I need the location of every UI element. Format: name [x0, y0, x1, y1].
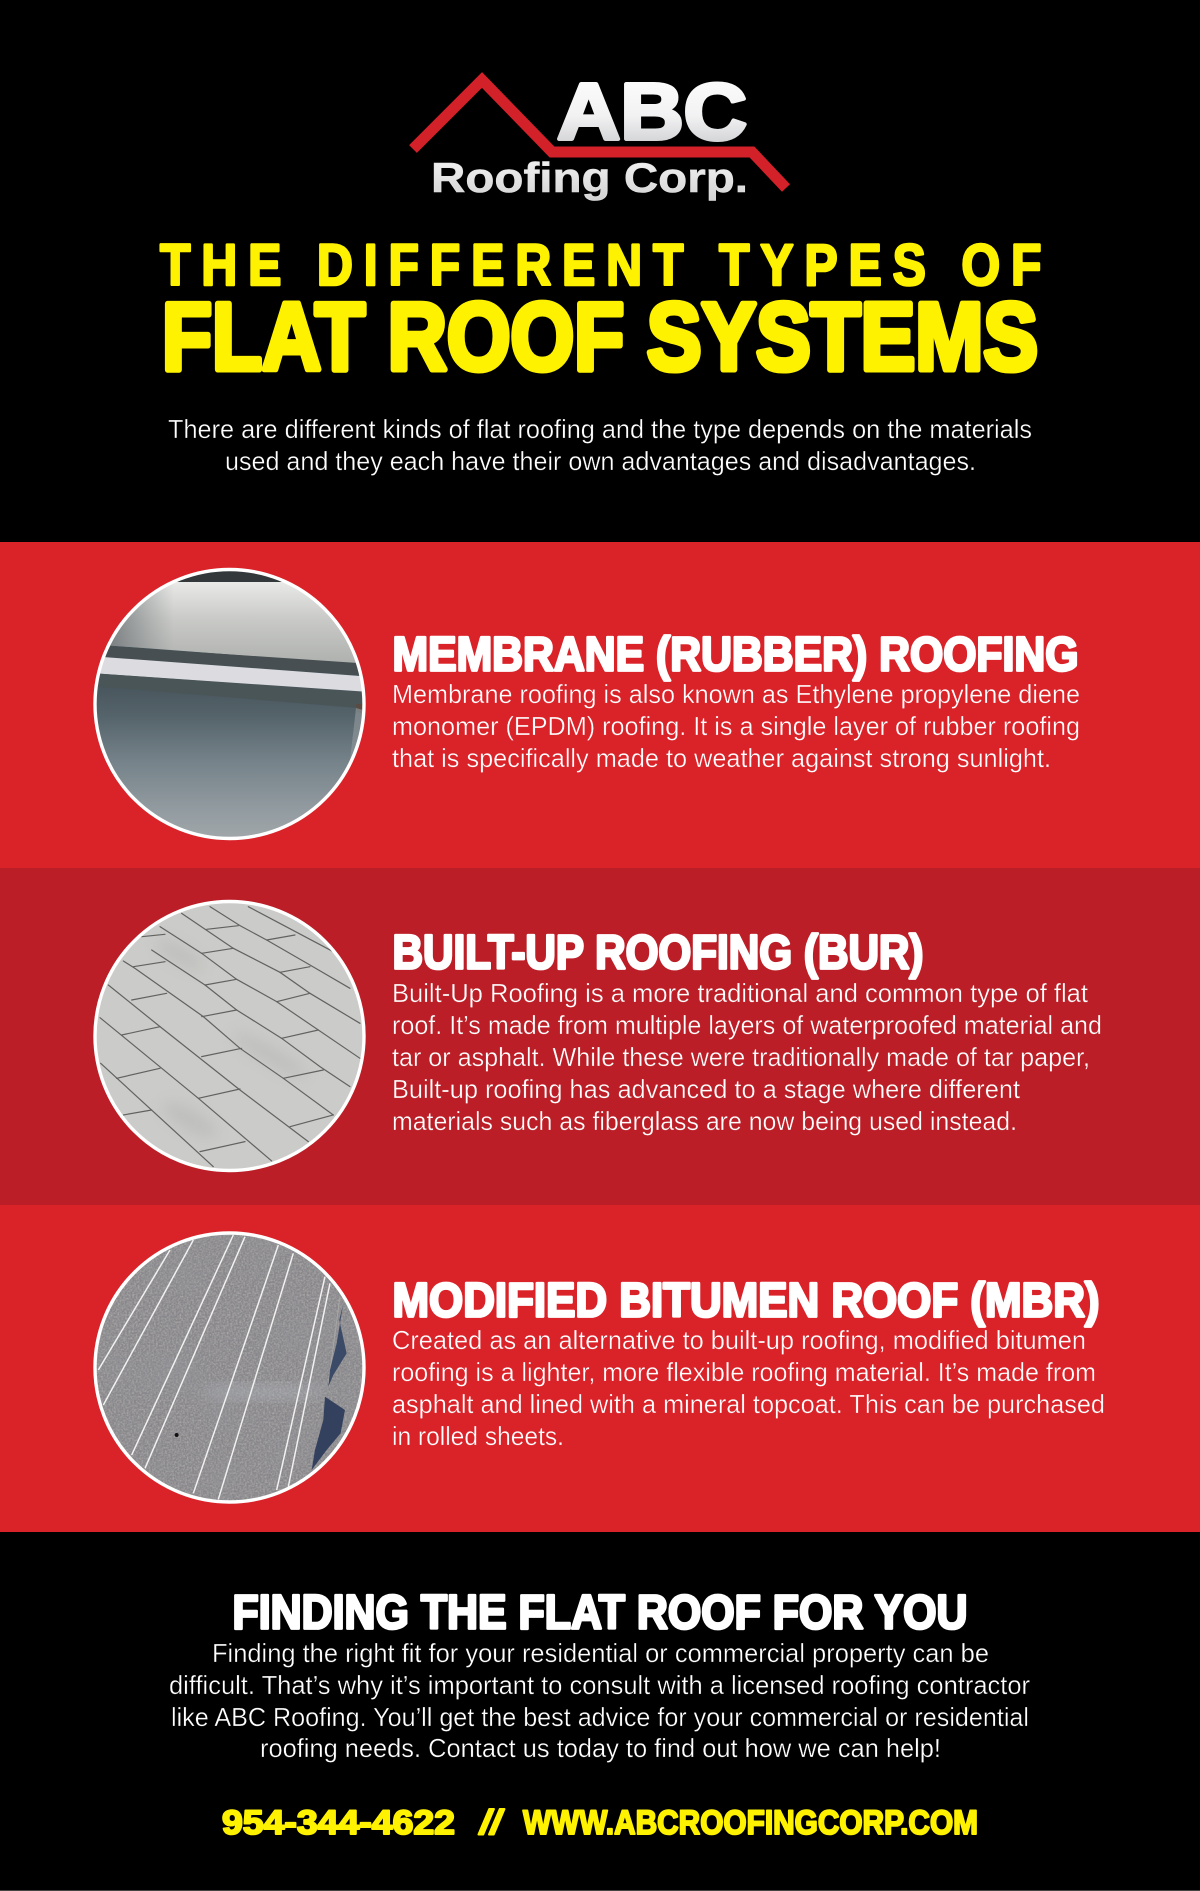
panel: built-up roofing: [0, 868, 1200, 1205]
logo: ABC Roofing Corp.: [413, 67, 786, 201]
panel: footer: [0, 1532, 1200, 1891]
panel: header: [0, 0, 1200, 542]
text: modified bitumen description: roofing is a lighter, more flexible roofing material. It’s made from: [392, 1357, 1096, 1387]
heading: modified bitumen: MODIFIED BITUMEN ROOF (MBR): [392, 1274, 1100, 1328]
text: footer description: difficult. That’s why it’s important to consult with a licensed roofing contractor: [169, 1670, 1030, 1700]
text: membrane description: Membrane roofing is also known as Ethylene propylene diene: [392, 679, 1080, 709]
text: built-up description: roof. It’s made from multiple layers of waterproofed material and: [392, 1010, 1102, 1040]
contact line: WWW.ABCROOFINGCORP.COM: [523, 1804, 978, 1842]
text: membrane description: [392, 679, 1080, 773]
photo: membrane roof: [90, 565, 370, 845]
contact line: //: [478, 1804, 505, 1842]
heading: finding the flat roof: FINDING THE FLAT ROOF FOR YOU: [232, 1586, 968, 1640]
title: [160, 233, 1041, 390]
text: built-up description: tar or asphalt. While these were traditionally made of tar paper,: [392, 1042, 1090, 1072]
heading: built-up: BUILT-UP ROOFING (BUR): [392, 926, 924, 980]
intro text: There are different kinds of flat roofing and the type depends on the materials: [168, 414, 1032, 444]
text: membrane description: that is specifically made to weather against strong sunlight.: [392, 743, 1051, 773]
logo: ABC Roofing Corp.: Roofing Corp.: [431, 154, 748, 201]
intro text: used and they each have their own advantages and disadvantages.: [225, 446, 976, 476]
text: footer description: roofing needs. Contact us today to find out how we can help!: [260, 1733, 941, 1763]
contact line: 954-344-4622: [222, 1804, 455, 1842]
text: modified bitumen description: [392, 1325, 1105, 1451]
text: footer description: Finding the right fit for your residential or commercial property can be: [212, 1638, 989, 1668]
panel: membrane roofing: [0, 542, 1200, 868]
intro text: [168, 414, 1032, 476]
text: membrane description: monomer (EPDM) roofing. It is a single layer of rubber roofing: [392, 711, 1080, 741]
title: THE DIFFERENT TYPES OF: [160, 233, 1041, 298]
logo: ABC Roofing Corp.: ABC: [557, 67, 747, 156]
text: footer description: [169, 1638, 1030, 1763]
text: built-up description: Built-up roofing has advanced to a stage where different: [392, 1074, 1021, 1104]
text: modified bitumen description: asphalt and lined with a mineral topcoat. This can be purchased: [392, 1389, 1105, 1419]
heading: membrane: MEMBRANE (RUBBER) ROOFING: [392, 628, 1078, 682]
panel: modified bitumen roof: [0, 1205, 1200, 1532]
text: modified bitumen description: Created as an alternative to built-up roofing, modified bitumen: [392, 1325, 1086, 1355]
contact line: [222, 1804, 978, 1842]
title: FLAT ROOF SYSTEMS: [162, 284, 1038, 390]
photo: modified bitumen roof: [90, 1228, 370, 1508]
text: modified bitumen description: in rolled sheets.: [392, 1421, 564, 1451]
text: footer description: like ABC Roofing. You’ll get the best advice for your commercial or residential: [171, 1702, 1029, 1732]
photo: built-up roof: [90, 897, 370, 1177]
text: built-up description: [392, 978, 1102, 1136]
text: built-up description: materials such as fiberglass are now being used instead.: [392, 1106, 1017, 1136]
text: built-up description: Built-Up Roofing is a more traditional and common type of flat: [392, 978, 1089, 1008]
